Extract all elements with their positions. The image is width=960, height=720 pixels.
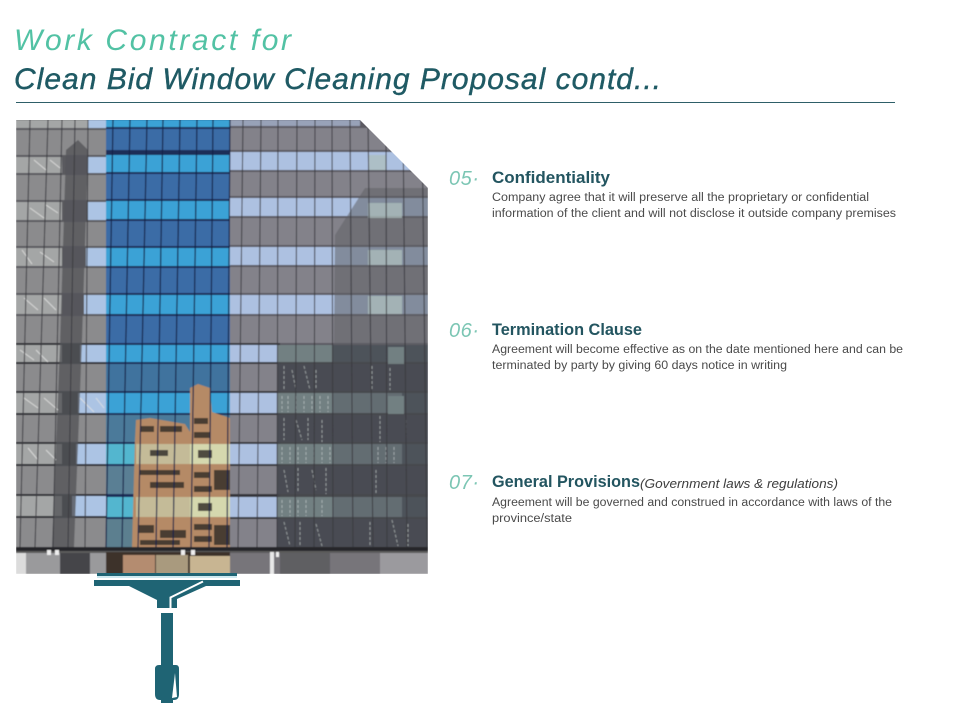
number 05: 05· [449,168,479,190]
body text: province/state [492,513,572,525]
number 06: 06· [449,320,479,342]
right grey section [230,120,428,548]
ground floor band [16,547,428,574]
left grey section [16,120,106,548]
body text [492,344,903,372]
item 05: confidentiality [449,168,896,220]
heading: General Provisions [492,472,640,491]
title line 2: Clean Bid Window Cleaning Proposal contd... [14,63,661,96]
orange reflected building [132,384,230,547]
body text: Company agree that it will preserve all the proprietary or confidential [492,192,869,204]
squeegee crossbar [94,580,240,586]
item 07: general provisions [449,472,892,525]
window mullions [20,120,427,547]
heading: Termination Clause [492,320,642,339]
body text: Agreement will be governed and construed in accordance with laws of the [492,497,892,509]
squeegee funnel [129,586,206,608]
icon: squeegee [94,573,240,703]
blue section [106,119,230,548]
body text [492,192,896,220]
number 07: 07· [449,472,479,494]
body text: Agreement will become effective as on the date mentioned here and can be [492,344,903,356]
body text: information of the client and will not disclose it outside company premises [492,208,896,220]
squeegee handle [161,613,173,667]
squeegee grip [155,665,179,703]
photo: glass building facade [16,119,428,574]
reflected tower, upper [334,188,428,345]
title line 1: Work Contract for [14,24,292,57]
reflected tower, lower [277,345,428,548]
title [14,24,661,96]
item 06: termination clause [449,320,903,372]
body text [492,497,892,525]
body text: terminated by party by giving 60 days notice in writing [492,360,787,372]
heading note: (Government laws & regulations) [640,477,838,491]
heading: Confidentiality [492,168,611,187]
squeegee rubber blade [97,573,237,576]
